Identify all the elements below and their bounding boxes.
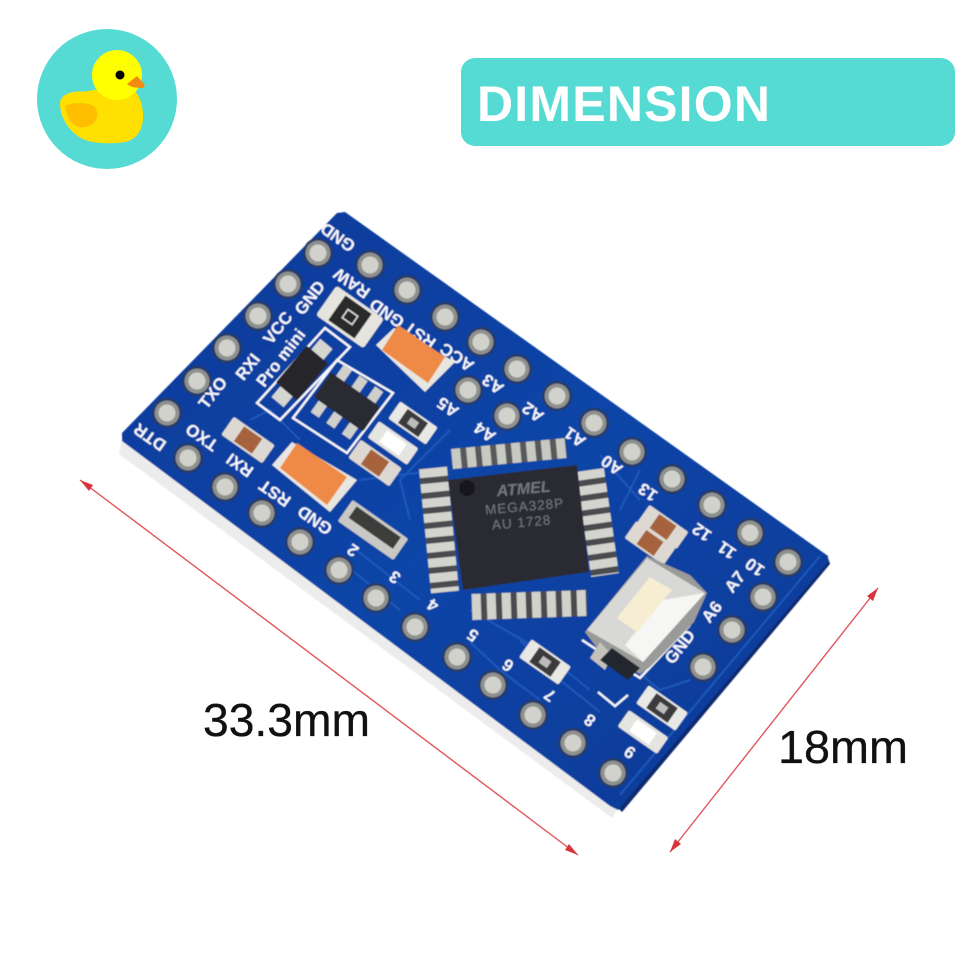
pin labels: TXO (195, 373, 231, 413)
header pads: right column and inner pads (453, 375, 778, 682)
circuit board (119, 212, 830, 818)
component: ATmega chip: AU 1728 (491, 512, 552, 533)
pin labels: RST (255, 475, 294, 511)
component: black resistor (316, 286, 384, 348)
pin labels: GND (291, 277, 329, 319)
component: ATmega chip: ATMEL (495, 479, 551, 500)
pin labels: Pro mini (253, 325, 309, 391)
silkscreen outlines (257, 328, 690, 706)
header pads: long bottom row (173, 443, 628, 788)
component: crystal (338, 500, 408, 560)
small parts near regulator (221, 401, 438, 486)
icon: duck (60, 50, 145, 143)
pin labels: A6 (698, 598, 726, 626)
pin labels: GND (294, 501, 336, 539)
pin labels: RXI (232, 350, 264, 384)
pin labels: 8 (581, 710, 599, 730)
label: length value: 33.3mm (203, 694, 370, 746)
pin labels: A4 (470, 418, 499, 446)
pin labels: A3 (479, 370, 507, 398)
pin labels: A7 (721, 568, 749, 596)
pin labels: DTR (130, 419, 170, 455)
pin header strip underside (119, 437, 618, 818)
pin labels: GND (661, 626, 699, 668)
component: regulator (306, 361, 388, 443)
pin labels: 10 (742, 554, 768, 580)
pin labels: 6 (499, 655, 517, 675)
arrow: width dimension line (670, 588, 878, 852)
lower resistors and led (519, 639, 688, 754)
component: orange capacitor 1 (376, 325, 455, 392)
pin labels (130, 218, 768, 762)
component: ATmega chip (448, 465, 589, 590)
pin labels: 3 (386, 567, 404, 587)
pin labels: 4 (423, 594, 442, 615)
component: microcontroller pins (433, 448, 605, 607)
pin labels: RXI (223, 449, 257, 481)
heading: dimension: DIMENSION (477, 76, 770, 132)
header pads: left column (152, 238, 333, 428)
pin labels: ACC (436, 339, 478, 375)
pin labels: A0 (598, 451, 626, 479)
component: diode (267, 335, 337, 411)
pin labels: 12 (689, 519, 715, 545)
pin labels: RAW (330, 263, 374, 302)
pin labels: GND (317, 218, 359, 256)
component: ATmega chip: MEGA328P (484, 496, 565, 517)
pin labels: 13 (635, 479, 661, 505)
pin labels: 7 (541, 685, 559, 705)
pin labels: 5 (464, 625, 482, 645)
component: orange capacitor 2 (272, 442, 357, 512)
board traces (250, 410, 820, 795)
capacitors near button (625, 505, 688, 565)
component: reset button (585, 556, 707, 680)
pin labels: TXO (182, 419, 222, 455)
heading: dimension (461, 58, 955, 146)
pin labels: 9 (621, 742, 639, 762)
pin labels: A2 (519, 398, 547, 426)
board body (122, 212, 828, 810)
pin labels: GND (366, 294, 408, 332)
pin labels: VCC (259, 308, 297, 348)
pin labels: RST (400, 317, 439, 353)
label: width value: 18mm (778, 721, 908, 773)
arrow: length dimension line (80, 480, 578, 855)
pin labels: 11 (714, 537, 740, 563)
pin labels: A5 (434, 393, 462, 421)
pin labels: A1 (561, 423, 589, 451)
logo: duck badge (37, 29, 177, 169)
header pads: long top row (355, 250, 803, 577)
pin labels: 2 (344, 540, 362, 560)
